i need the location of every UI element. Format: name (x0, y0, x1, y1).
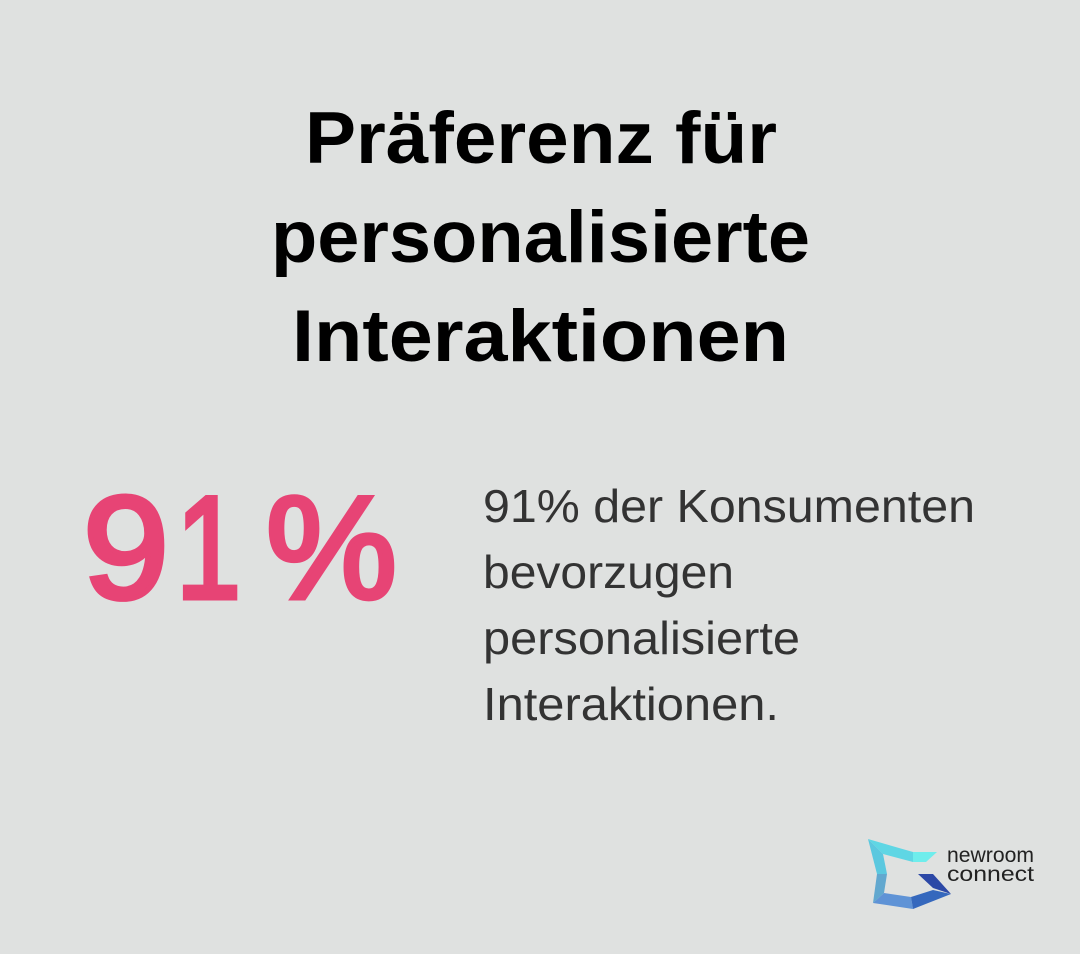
icon: logo mark (868, 839, 951, 909)
description text: personalisierte (483, 612, 800, 664)
title (271, 98, 810, 377)
big statistic: 91% (83, 466, 397, 629)
logo: newroom connect (868, 839, 1034, 909)
description text (483, 480, 975, 730)
title: personalisierte (271, 197, 810, 278)
title: Präferenz für (305, 98, 777, 179)
logo wordmark (947, 844, 1034, 886)
logo wordmark: connect (947, 863, 1034, 886)
title: Interaktionen (292, 296, 789, 377)
description text: bevorzugen (483, 546, 734, 598)
big statistic: 91%: % (266, 466, 397, 629)
description text: Interaktionen. (483, 678, 779, 730)
logo wordmark: newroom (947, 844, 1034, 867)
description text: 91% der Konsumenten (483, 480, 975, 532)
big statistic: 91%: 1 (176, 466, 241, 629)
big statistic: 91%: 9 (83, 466, 169, 629)
